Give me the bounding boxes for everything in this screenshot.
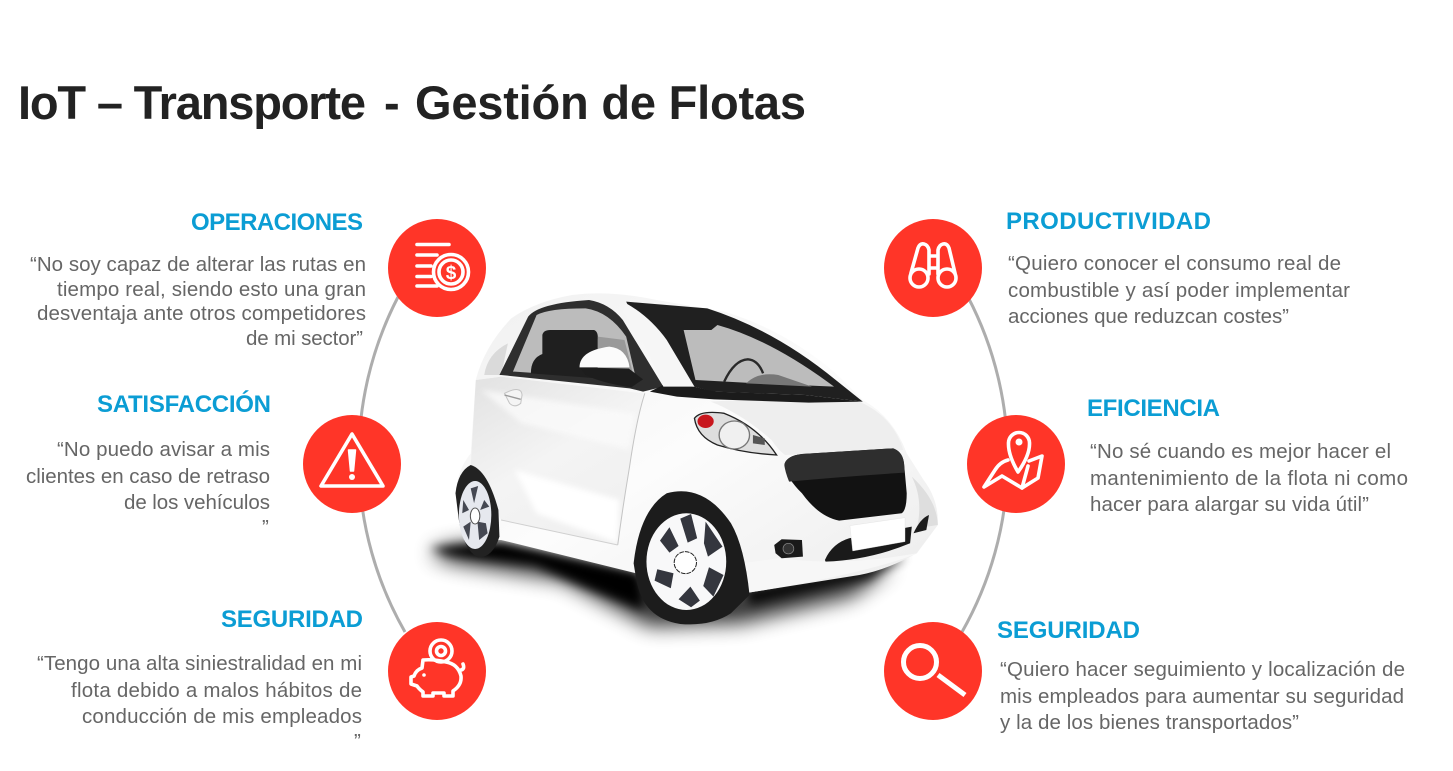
text block: seguridad right: “Quiero hacer seguimiento y localización de xyxy=(1000,658,1405,681)
text block: seguridad right: y la de los bienes transportados” xyxy=(1000,711,1299,734)
circle icon: coins / operaciones: $ xyxy=(446,263,457,284)
front wheel xyxy=(634,491,750,624)
text block: satisfacción xyxy=(26,438,270,539)
side mirror xyxy=(580,347,643,387)
title: IoT – Transporte xyxy=(18,76,366,129)
circle icon: binoculars / productividad xyxy=(884,219,982,317)
title: - xyxy=(384,76,400,129)
text block: eficiencia xyxy=(1090,440,1408,516)
text block: seguridad left: ” xyxy=(354,730,361,753)
text block: productividad: combustible y así poder implementar xyxy=(1008,279,1350,302)
text block: seguridad right xyxy=(1000,658,1405,734)
fog lamp xyxy=(774,539,803,558)
text block: eficiencia: hacer para alargar su vida útil” xyxy=(1090,493,1369,516)
windows xyxy=(499,300,863,403)
car illustration xyxy=(430,293,938,627)
text block: seguridad left: “Tengo una alta siniestralidad en mi xyxy=(37,652,362,675)
connecting arc: left xyxy=(359,297,405,632)
grille xyxy=(784,448,907,521)
headlight xyxy=(694,412,777,455)
text block: eficiencia: “No sé cuando es mejor hacer el xyxy=(1090,440,1391,463)
circle icon: warning triangle / satisfacción xyxy=(303,415,401,513)
title xyxy=(18,76,806,129)
circle icon: map pin / eficiencia xyxy=(967,415,1065,513)
circle icon: magnifying glass / seguridad xyxy=(884,622,982,720)
text block: satisfacción: “No puedo avisar a mis xyxy=(57,438,270,461)
text block: satisfacción: clientes en caso de retraso xyxy=(26,465,270,488)
text block: satisfacción: de los vehículos xyxy=(124,491,270,514)
door handle xyxy=(504,390,522,406)
licence plate and lower intake xyxy=(825,515,929,562)
text block: operaciones xyxy=(30,253,366,350)
text block: operaciones: desventaja ante otros competidores xyxy=(37,302,366,325)
circle icon: coins / operaciones xyxy=(388,219,486,317)
heading: operaciones: OPERACIONES xyxy=(191,209,363,236)
heading: seguridad left: SEGURIDAD xyxy=(221,606,363,633)
text block: eficiencia: mantenimiento de la flota ni como xyxy=(1090,467,1408,490)
text block: satisfacción: ” xyxy=(262,516,269,539)
text block: productividad: acciones que reduzcan costes” xyxy=(1008,305,1289,328)
circle icon: piggy bank / seguridad xyxy=(388,622,486,720)
title: Gestión de Flotas xyxy=(415,76,806,129)
text block: seguridad left: flota debido a malos hábitos de xyxy=(71,679,362,702)
heading: productividad: PRODUCTIVIDAD xyxy=(1006,208,1211,235)
heading: satisfacción: SATISFACCIÓN xyxy=(97,390,271,418)
car body xyxy=(455,293,938,593)
heading: eficiencia: EFICIENCIA xyxy=(1087,395,1220,422)
text block: seguridad left: conducción de mis empleados xyxy=(82,705,362,728)
rear wheel xyxy=(455,465,499,557)
connecting arc: right xyxy=(962,297,1008,632)
text block: seguridad left xyxy=(37,652,362,753)
text block: productividad xyxy=(1008,252,1350,328)
text block: operaciones: de mi sector” xyxy=(246,327,363,350)
text block: productividad: “Quiero conocer el consumo real de xyxy=(1008,252,1341,275)
text block: operaciones: tiempo real, siendo esto una gran xyxy=(57,278,366,301)
text block: seguridad right: mis empleados para aumentar su seguridad xyxy=(1000,685,1404,708)
car shadow xyxy=(430,542,907,627)
heading: seguridad right: SEGURIDAD xyxy=(997,617,1140,644)
text block: operaciones: “No soy capaz de alterar las rutas en xyxy=(30,253,366,276)
